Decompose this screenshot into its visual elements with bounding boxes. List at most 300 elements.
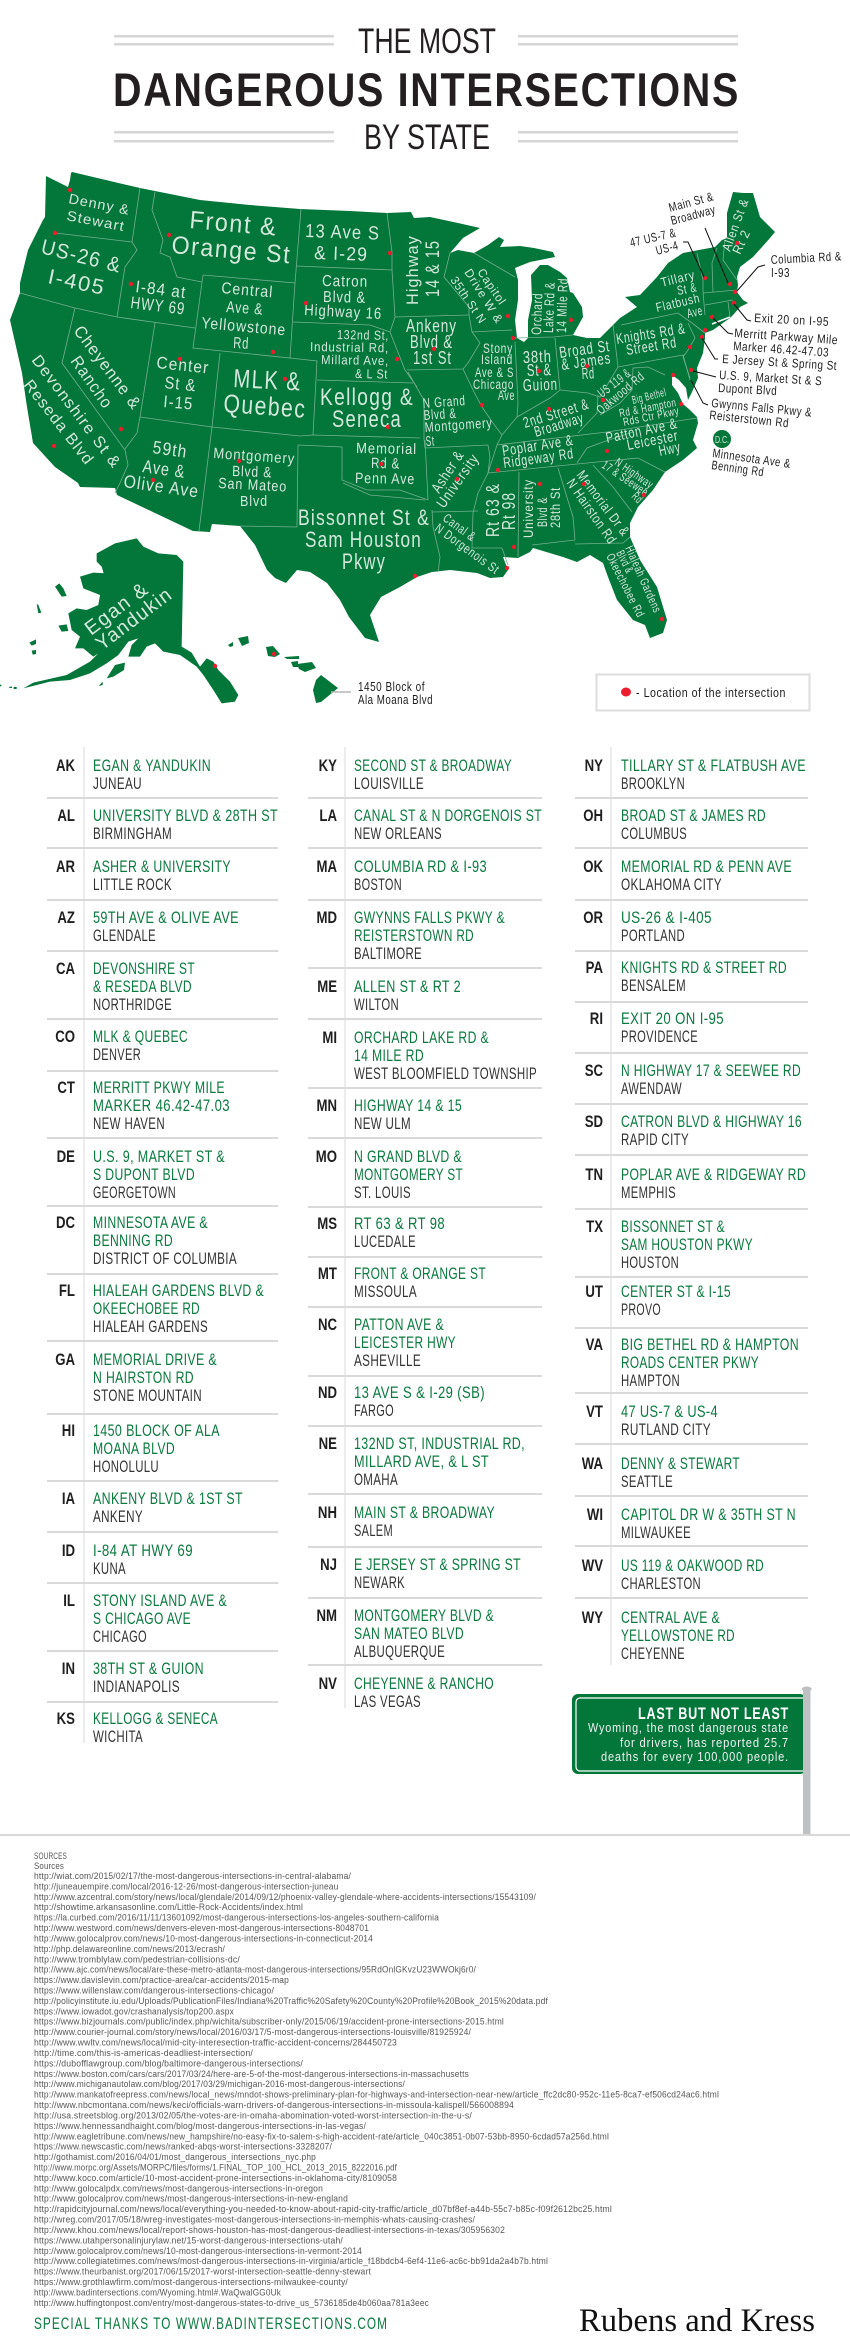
row: SC	[585, 1062, 801, 1098]
row: MD: GWYNNS FALLS PKWY &	[354, 909, 505, 927]
row: NC: LEICESTER HWY	[354, 1334, 456, 1352]
row: TN	[585, 1166, 806, 1202]
label: LA: N Dorgenois St	[432, 520, 503, 577]
row: IL: S CHICAGO AVE	[93, 1610, 191, 1628]
row: RI: PROVIDENCE	[621, 1028, 698, 1046]
label: IN: 38th	[522, 347, 552, 367]
label: MI: Lake Rd &	[540, 282, 558, 333]
row: NJ	[320, 1556, 521, 1592]
label: FL	[603, 544, 664, 620]
sources: https://www.iowadot.gov/crashanalysis/top200.aspx	[34, 2006, 234, 2017]
row: NV: LAS VEGAS	[354, 1693, 421, 1711]
label: IA: Ankeny	[406, 316, 457, 336]
row: WI	[587, 1506, 796, 1542]
row: AR	[56, 858, 231, 894]
callout: VT: 47 US-7 &	[629, 226, 677, 250]
label: IN	[522, 347, 558, 395]
label: NE	[310, 327, 389, 382]
label: MT	[170, 206, 292, 269]
label: SC: 17 & Seewee	[599, 458, 651, 499]
label: UT: I-15	[163, 392, 194, 414]
row: OK: MEMORIAL RD & PENN AVE	[621, 858, 792, 876]
label: LA	[432, 510, 503, 577]
label: WY: Yellowstone	[201, 315, 287, 339]
label: SC: Rd	[629, 489, 646, 506]
label: WY	[201, 280, 287, 353]
label: VA	[618, 387, 680, 429]
label: KY: Broadway	[532, 410, 586, 441]
callout: RI: Exit 20 on I-95	[754, 311, 829, 329]
row: SD: SD	[585, 1113, 603, 1131]
sources: http://wiat.com/2015/02/17/the-most-dangerous-intersections-in-central-alabama/	[34, 1871, 351, 1882]
sources: https://www.davislevin.com/practice-area/car-accidents/2015-map	[34, 1975, 289, 1986]
label: CA: Devonshire St &	[28, 352, 124, 472]
sources: SOURCES	[34, 1851, 67, 1862]
label: NM: Blvd &	[232, 463, 272, 481]
row: WA: DENNY & STEWART	[621, 1455, 740, 1473]
Alaska: Yandukin	[92, 583, 177, 655]
row: DC	[56, 1214, 237, 1268]
label: MN	[403, 235, 444, 305]
row: AK: EGAN & YANDUKIN	[93, 757, 211, 775]
row: NC: PATTON AVE &	[354, 1316, 444, 1334]
label: NE: & L St	[355, 366, 388, 382]
sources: http://www.badintersections.com/Wyoming.html#.WaQwalGG0Uk	[34, 2287, 281, 2298]
sources: https://www.willenslaw.com/dangerous-intersections-chicago/	[34, 1986, 274, 1996]
sources: http://www.westword.com/news/denvers-eleven-most-dangerous-intersections-8048701	[34, 1923, 369, 1934]
row: HI: MOANA BLVD	[93, 1440, 175, 1458]
label: OK: Penn Ave	[355, 470, 415, 488]
label: MT: Orange St	[170, 231, 292, 269]
row: NE: 132ND ST, INDUSTRIAL RD,	[354, 1435, 525, 1453]
row: PA: BENSALEM	[621, 977, 686, 995]
row: PA: PA	[586, 959, 603, 977]
row: WI: WI	[587, 1506, 603, 1524]
label: MO: Montgomery	[424, 414, 493, 435]
label: GA: N Hairston Rd	[564, 476, 620, 547]
sources: http://www.ajc.com/news/local/are-these-metro-atlanta-most-dangerous-intersections/95RdOnlGKvzU23WWOkj6r0/	[34, 1965, 476, 1976]
road sign callout	[572, 1686, 812, 1835]
sources: http://gothamist.com/2016/04/01/most_dangerous_intersections_nyc.php	[34, 2152, 316, 2163]
row: VT	[586, 1403, 718, 1439]
row: WY: WY	[582, 1609, 603, 1627]
row: MA: MA	[317, 858, 337, 876]
label: FL: Blvd &	[613, 548, 637, 576]
label: VA: Rd & Hampton	[618, 397, 678, 420]
Alaska: Egan &	[81, 578, 153, 640]
row: CT: NEW HAVEN	[93, 1115, 165, 1133]
row: MS: MS	[317, 1215, 337, 1233]
legend: - Location of the intersection	[636, 685, 786, 700]
label: NY: Tillary	[659, 267, 697, 290]
label: WV: US 119 &	[595, 365, 634, 400]
row: IN: INDIANAPOLIS	[93, 1678, 180, 1696]
label: NM	[213, 445, 296, 510]
label: OH	[558, 338, 612, 383]
row: VT: RUTLAND CITY	[621, 1421, 711, 1439]
row: CT	[57, 1079, 230, 1133]
sources: http://www.morpc.org/Assets/MORPC/files/forms/1.FINAL_TOP_100_HCL_2013_2015_8222016.pdf	[34, 2162, 397, 2174]
row: VA: HAMPTON	[621, 1372, 680, 1390]
row: MI: WEST BLOOMFIELD TOWNSHIP	[354, 1065, 537, 1083]
row: HI: 1450 BLOCK OF ALA	[93, 1422, 220, 1440]
row: VA: VA	[586, 1336, 603, 1354]
label: SD	[304, 273, 383, 323]
label: NC	[604, 415, 682, 460]
row: CO	[55, 1028, 188, 1064]
row: WY: CHEYENNE	[621, 1645, 685, 1663]
label: AL	[520, 479, 563, 538]
label: TX: Pkwy	[342, 549, 386, 574]
row: AZ: GLENDALE	[93, 927, 156, 945]
row: MI	[322, 1029, 537, 1083]
title: BY STATE	[364, 118, 490, 157]
row: PA: KNIGHTS RD & STREET RD	[621, 959, 787, 977]
label: IA: 1st St	[413, 348, 452, 368]
label: NE: Millard Ave,	[321, 352, 389, 368]
row: KY	[319, 757, 512, 793]
label: PA: Street Rd	[625, 334, 678, 359]
sources: http://www.golocalpdx.com/news/most-dangerous-intersections-in-oregon	[34, 2183, 323, 2194]
row: AL: BIRMINGHAM	[93, 825, 172, 843]
callout: VT	[629, 226, 680, 258]
label: KS	[320, 384, 414, 433]
list column 2	[316, 757, 542, 1711]
list column 1	[55, 757, 278, 1746]
row: NY	[585, 757, 806, 793]
row: CA: CA	[56, 960, 75, 978]
label: AZ: 59th	[151, 437, 189, 462]
label: NC: Leicester	[626, 427, 680, 454]
label: MO: Blvd &	[423, 405, 457, 423]
row: UT: CENTER ST & I-15	[621, 1283, 731, 1301]
label: ME: Rt 2	[729, 227, 753, 256]
label: AL: 28th St	[547, 487, 563, 528]
row: NM: MONTGOMERY BLVD &	[354, 1607, 494, 1625]
label: OK: Rd &	[371, 455, 400, 473]
row: KS: KELLOGG & SENECA	[93, 1710, 218, 1728]
row: AL: UNIVERSITY BLVD & 28TH ST	[93, 807, 278, 825]
label: KS: Seneca	[332, 406, 402, 433]
label: NE: 132nd St,	[337, 327, 389, 343]
label: MO	[422, 392, 493, 449]
row: AZ: AZ	[57, 909, 75, 927]
label: FL: Hialeah Gardens	[622, 544, 664, 615]
row: AK: JUNEAU	[93, 775, 142, 793]
row: OK: OK	[583, 858, 603, 876]
row: KS	[57, 1710, 218, 1746]
label: IA: Blvd &	[410, 332, 453, 352]
row: ME	[317, 978, 461, 1014]
row: ID: ID	[62, 1542, 75, 1560]
callout: DE	[718, 368, 822, 398]
label: MI	[528, 278, 571, 335]
sources: https://dubofflawgroup.com/blog/baltimore-dangerous-intersections/	[34, 2058, 303, 2069]
row: MO	[316, 1148, 463, 1202]
row: NH: MAIN ST & BROADWAY	[354, 1504, 495, 1522]
callout: DC: Minnesota Ave &	[712, 446, 792, 471]
row: NE	[319, 1435, 525, 1489]
label: WY: Central	[221, 280, 274, 302]
row: KS: KS	[57, 1710, 75, 1728]
label: MO: St	[425, 432, 435, 449]
row: IN: IN	[62, 1660, 75, 1678]
label: NV: Rancho	[67, 352, 117, 412]
row: NC: NC	[318, 1316, 337, 1334]
label: IL	[473, 340, 515, 403]
road sign callout: Wyoming, the most dangerous state	[588, 1720, 789, 1735]
callout: DC: Benning Rd	[711, 458, 765, 479]
row: NC: ASHEVILLE	[354, 1352, 421, 1370]
row: RI: EXIT 20 ON I-95	[621, 1010, 724, 1028]
label: TN	[501, 432, 575, 472]
label: WY: Ave &	[226, 299, 264, 319]
row: ME: WILTON	[354, 996, 399, 1014]
label: AZ: Olive Ave	[122, 471, 200, 502]
row: AZ: 59TH AVE & OLIVE AVE	[93, 909, 239, 927]
row: OR: PORTLAND	[621, 927, 685, 945]
label: MS	[483, 483, 519, 537]
label: GA: Memorial Dr &	[574, 467, 633, 539]
row: WV	[582, 1557, 764, 1593]
row: NM: ALBUQUERQUE	[354, 1643, 445, 1661]
row: DE	[57, 1148, 225, 1202]
row: MI: 14 MILE RD	[354, 1047, 424, 1065]
sources: http://www.eagletribune.com/news/new_hampshire/no-easy-fix-to-salem-s-high-accident-rate/article_040c3851-0b07-53bb-8950-6cdad57a256d.html	[34, 2131, 609, 2142]
row: CT: MARKER 46.42-47.03	[93, 1097, 230, 1115]
callout: DE: U.S. 9, Market St & S	[719, 368, 822, 388]
label: SC: N Highway	[612, 455, 656, 492]
row: SC: SC	[585, 1062, 603, 1080]
row: IN: 38TH ST & GUION	[93, 1660, 204, 1678]
label: OK	[355, 440, 417, 488]
row: GA: STONE MOUNTAIN	[93, 1387, 202, 1405]
row: OH: BROAD ST & JAMES RD	[621, 807, 766, 825]
row: TX: TX	[586, 1218, 603, 1236]
label: WI: Capitol	[475, 266, 509, 308]
callout: MA	[770, 249, 842, 280]
label: ND: & I-29	[314, 243, 369, 266]
callout: NH	[667, 189, 717, 228]
label: WV	[593, 365, 647, 417]
label: WA: Stewart	[65, 207, 126, 234]
row: MS	[317, 1215, 445, 1251]
row: VT: 47 US-7 & US-4	[621, 1403, 718, 1421]
callout: DE: Dupont Blvd	[718, 381, 777, 398]
callout: DC: D.C.	[715, 435, 729, 446]
row: HI: HI	[62, 1422, 75, 1440]
sources: http://juneauempire.com/local/2016-12-26/most-dangerous-intersection-juneau	[34, 1881, 338, 1892]
row: DE: GEORGETOWN	[93, 1184, 176, 1202]
row: WA	[582, 1455, 740, 1491]
row: NM: NM	[316, 1607, 337, 1625]
row: TX	[586, 1218, 753, 1272]
sources: http://php.delawareonline.com/news/2013/ecrash/	[34, 1944, 225, 1955]
sources: http://www.huffingtonpost.com/entry/most-dangerous-states-to-drive_us_5736185de4b060aa781a3eec	[34, 2298, 429, 2309]
row: DE: S DUPONT BLVD	[93, 1166, 195, 1184]
row: ME: ALLEN ST & RT 2	[354, 978, 461, 996]
row: LA: LA	[319, 807, 337, 825]
row: WI: CAPITOL DR W & 35TH ST N	[621, 1506, 796, 1524]
label: OH: Broad St	[558, 338, 611, 362]
row: OK: OKLAHOMA CITY	[621, 876, 722, 894]
label: MT: Front &	[188, 206, 279, 242]
row: MN: HIGHWAY 14 & 15	[354, 1097, 462, 1115]
label: AZ: Ave &	[141, 456, 187, 482]
row: AK: AK	[56, 757, 75, 775]
row: MI: ORCHARD LAKE RD &	[354, 1029, 489, 1047]
list column 3	[582, 757, 806, 1663]
row: MO: MO	[316, 1148, 337, 1166]
row: NC	[318, 1316, 456, 1370]
label: VA: Rds Ctr Pkwy	[622, 405, 680, 429]
label: MN: Highway	[403, 235, 422, 305]
sources: https://www.boston.com/cars/cars/2017/03/24/here-are-5-of-the-most-dangerous-intersections-in-massachusetts	[34, 2069, 469, 2080]
row: UT: UT	[585, 1283, 603, 1301]
row: MD: REISTERSTOWN RD	[354, 927, 474, 945]
label: KY	[521, 396, 591, 441]
row: NJ: E JERSEY ST & SPRING ST	[354, 1556, 521, 1574]
label: TN: Poplar Ave &	[501, 432, 575, 460]
row: MN	[316, 1097, 462, 1133]
sources: http://www.mankatofreepress.com/news/local_news/mndot-shows-preliminary-plan-for-highways-and-intersection-near-new/article_ffc2dc80-952c-11e5-8ca7-ef506cd24ac6.html	[34, 2090, 719, 2101]
sources: http://www.nbcmontana.com/news/keci/officials-warn-drivers-of-dangerous-intersections-in-missoula-kalispell/566008894	[34, 2100, 514, 2111]
row: CA	[56, 960, 195, 1014]
sources: https://www.grothlawfirm.com/most-dangerous-intersections-milwaukee-county/	[34, 2277, 348, 2288]
label: NC: Hwy	[657, 439, 682, 460]
row: MD: BALTIMORE	[354, 945, 422, 963]
row: ND: 13 AVE S & I-29 (SB)	[354, 1384, 485, 1402]
row: DC: DC	[56, 1214, 75, 1232]
label: IL: Island	[481, 351, 513, 367]
row: WA: WA	[582, 1455, 603, 1473]
label: UT: Center	[156, 353, 210, 378]
row: OR: US-26 & I-405	[621, 909, 712, 927]
label: OR: US-26 &	[39, 236, 124, 278]
callout: VT: US-4	[654, 238, 680, 258]
row: TX: HOUSTON	[621, 1254, 679, 1272]
label: NC: Patton Ave &	[604, 415, 679, 447]
row: SD: RAPID CITY	[621, 1131, 689, 1149]
row: NJ: NEWARK	[354, 1574, 405, 1592]
label: SD: Highway 16	[304, 302, 383, 323]
sources: http://www.courier-journal.com/story/news/local/2016/03/17/5-most-dangerous-intersections-louisville/81925924/	[34, 2027, 471, 2038]
sources: https://la.curbed.com/2016/11/11/13601092/most-dangerous-intersections-los-angeles-southern-california	[34, 1913, 439, 1924]
label: AZ	[122, 437, 200, 502]
row: CO: MLK & QUEBEC	[93, 1028, 188, 1046]
row: IL: STONY ISLAND AVE &	[93, 1592, 227, 1610]
special thanks: SPECIAL THANKS TO WWW.BADINTERSECTIONS.COM	[34, 2315, 388, 2333]
label: IL: Ave & S	[475, 364, 514, 380]
label: ND: 13 Ave S	[305, 221, 381, 245]
row: MT: MISSOULA	[354, 1283, 417, 1301]
sources: http://www.tromblylaw.com/pedestrian-collisions-dc/	[34, 1954, 240, 1965]
row: WY: CENTRAL AVE &	[621, 1609, 720, 1627]
sources: http://policyinstitute.iu.edu/Uploads/PublicationFiles/Indiana%20Traffic%20Safety%20County%20Profile%20Book_2015%20data.pdf	[34, 1996, 548, 2007]
label: ME: Allen St &	[719, 196, 752, 253]
row: AR: AR	[56, 858, 75, 876]
row: CO: DENVER	[93, 1046, 141, 1064]
label: UT	[156, 353, 210, 414]
row: MA: BOSTON	[354, 876, 402, 894]
label: CO: MLK &	[233, 363, 302, 397]
row: MO: ST. LOUIS	[354, 1184, 411, 1202]
label: OH: & James	[560, 350, 612, 374]
label: IL: Ave	[498, 387, 515, 403]
row: LA: NEW ORLEANS	[354, 825, 442, 843]
callout: MD	[709, 396, 813, 430]
callout: DC	[711, 430, 792, 479]
label: NE: Industrial Rd,	[310, 339, 389, 355]
sources: http://www.collegiatetimes.com/news/most-dangerous-intersections-in-virginia/article_f18bdcb4-6ef4-11e6-ac6c-bb91da2a4b7b.html	[34, 2256, 548, 2267]
label: FL: Okeechobee Rd	[603, 551, 648, 620]
row: VT: VT	[586, 1403, 603, 1421]
label: NY: Flatbush	[654, 290, 702, 315]
label: WY: Rd	[233, 335, 250, 353]
label: IA	[406, 316, 457, 368]
label: NY	[654, 267, 704, 321]
row: NV: NV	[319, 1675, 337, 1693]
sources: http://www.wwltv.com/news/local/mid-city-interesection-traffic-accident-concerns/284450723	[34, 2038, 397, 2049]
row: OR: OR	[583, 909, 603, 927]
row: OH: COLUMBUS	[621, 825, 687, 843]
label: TN: Ridgeway Rd	[502, 445, 575, 472]
row: NM: SAN MATEO BLVD	[354, 1625, 464, 1643]
row: KS: WICHITA	[93, 1728, 143, 1746]
row: MN: MN	[316, 1097, 337, 1115]
row: SD	[585, 1113, 802, 1149]
row: NV	[319, 1675, 494, 1711]
callout: HI: Ala Moana Blvd	[358, 693, 433, 707]
label: MI: Orchard	[528, 293, 545, 335]
row: CO: CO	[55, 1028, 75, 1046]
sources: http://www.golocalprov.com/news/10-most-dangerous-intersections-in-connecticut-2014	[34, 1934, 373, 1944]
row: NY: NY	[585, 757, 603, 775]
row: CT: CT	[57, 1079, 75, 1097]
row: DC: BENNING RD	[93, 1232, 173, 1250]
row: VA	[586, 1336, 799, 1390]
row: NJ: NJ	[320, 1556, 337, 1574]
row: IN	[62, 1660, 204, 1696]
row: MA	[317, 858, 487, 894]
row: TX: BISSONNET ST &	[621, 1218, 725, 1236]
row: IL	[63, 1592, 227, 1646]
row: GA	[55, 1351, 217, 1405]
sources: http://usa.streetsblog.org/2013/02/05/the-votes-are-in-omaha-abomination-voted-worst-intersection-in-the-u-s/	[34, 2110, 472, 2121]
sources: http://rapidcityjournal.com/news/local/everything-you-needed-to-know-about-rapid-city-traffic/article_d07bf8ef-a44b-55c7-b85c-f09f2612bc25.html	[34, 2204, 612, 2215]
road sign callout: for drivers, has reported 25.7	[620, 1735, 789, 1750]
row: IA: ANKENY BLVD & 1ST ST	[93, 1490, 243, 1508]
callout: HI: 1450 Block of	[358, 680, 425, 694]
row: ID: KUNA	[93, 1560, 126, 1578]
row: FL: HIALEAH GARDENS BLVD &	[93, 1282, 264, 1300]
label: AR: Asher &	[428, 448, 468, 496]
label: WV: Oakwood Rd	[593, 369, 647, 417]
label: MO: N Grand	[422, 392, 466, 411]
row: NE: NE	[319, 1435, 337, 1453]
row: ID	[62, 1542, 193, 1578]
callout: NH: Main St &	[667, 189, 715, 215]
label: OK: Memorial	[356, 440, 417, 458]
row: SC: AWENDAW	[621, 1080, 682, 1098]
row: AK	[56, 757, 211, 793]
red location dots	[52, 188, 739, 668]
road sign callout: deaths for every 100,000 people.	[601, 1749, 789, 1764]
row: MS: RT 63 & RT 98	[354, 1215, 445, 1233]
label: IN: Guion	[522, 375, 558, 395]
label: ID: I-84 at	[135, 277, 187, 302]
row: AL: AL	[57, 807, 75, 825]
